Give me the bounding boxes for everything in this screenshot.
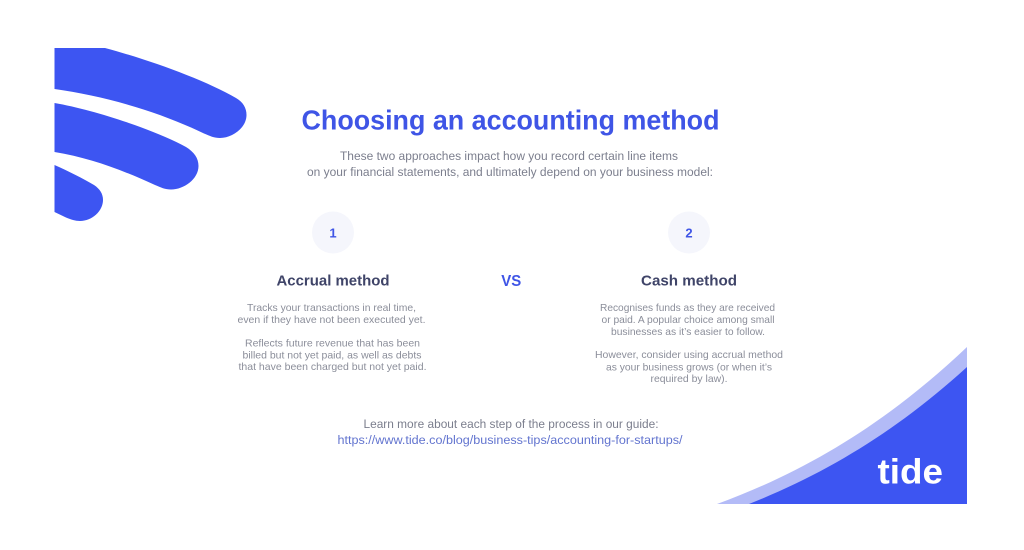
- panel: accrual method: [238, 212, 426, 373]
- decorative top-left arcs: [54, 48, 246, 221]
- text: cash description: required by law).: [650, 374, 728, 385]
- subtitle: on your financial statements, and ultimately depend on your business model:: [307, 165, 713, 179]
- guide link: https://www.tide.co/blog/business-tips/accounting-for-startups/: [338, 433, 683, 447]
- text: accrual description: Tracks your transactions in real time,: [247, 303, 416, 314]
- corner shape: dark band: [749, 367, 967, 504]
- vs label: VS: [501, 273, 521, 290]
- text: cash description: Recognises funds as they are received: [600, 303, 775, 314]
- number badge 2: 2: [685, 226, 693, 240]
- subtitle: These two approaches impact how you record certain line items: [340, 149, 678, 163]
- corner shape: light band: [717, 347, 967, 504]
- text: cash description: or paid. A popular choice among small: [602, 315, 774, 326]
- title: Choosing an accounting method: [302, 104, 720, 136]
- heading: accrual method: Accrual method: [276, 272, 390, 290]
- text: accrual description: billed but not yet paid, as well as debts: [242, 350, 422, 362]
- number badge 1: 1: [329, 226, 337, 240]
- text: cash description: However, consider using accrual method: [595, 350, 783, 361]
- text: accrual description: even if they have not been executed yet.: [238, 315, 426, 326]
- guide call to action: [338, 417, 683, 447]
- arc: small band: [54, 165, 103, 221]
- text: cash description: businesses as it’s easier to follow.: [611, 327, 765, 338]
- text: accrual description: [238, 303, 426, 373]
- guide call to action: Learn more about each step of the process in our guide:: [364, 417, 658, 431]
- panel: cash method: [595, 212, 783, 385]
- arc: middle band: [54, 103, 198, 190]
- text: cash description: [595, 303, 783, 385]
- text: accrual description: that have been charged but not yet paid.: [238, 362, 426, 373]
- subtitle: [307, 149, 713, 179]
- number badge 2: [668, 212, 710, 254]
- heading: cash method: Cash method: [641, 272, 737, 290]
- text: cash description: as your business grows (or when it’s: [606, 362, 772, 374]
- number badge 1: [312, 212, 354, 254]
- text: accrual description: Reflects future revenue that has been: [245, 338, 420, 350]
- logo: tide: tide: [878, 452, 943, 492]
- arc: top band: [54, 48, 246, 138]
